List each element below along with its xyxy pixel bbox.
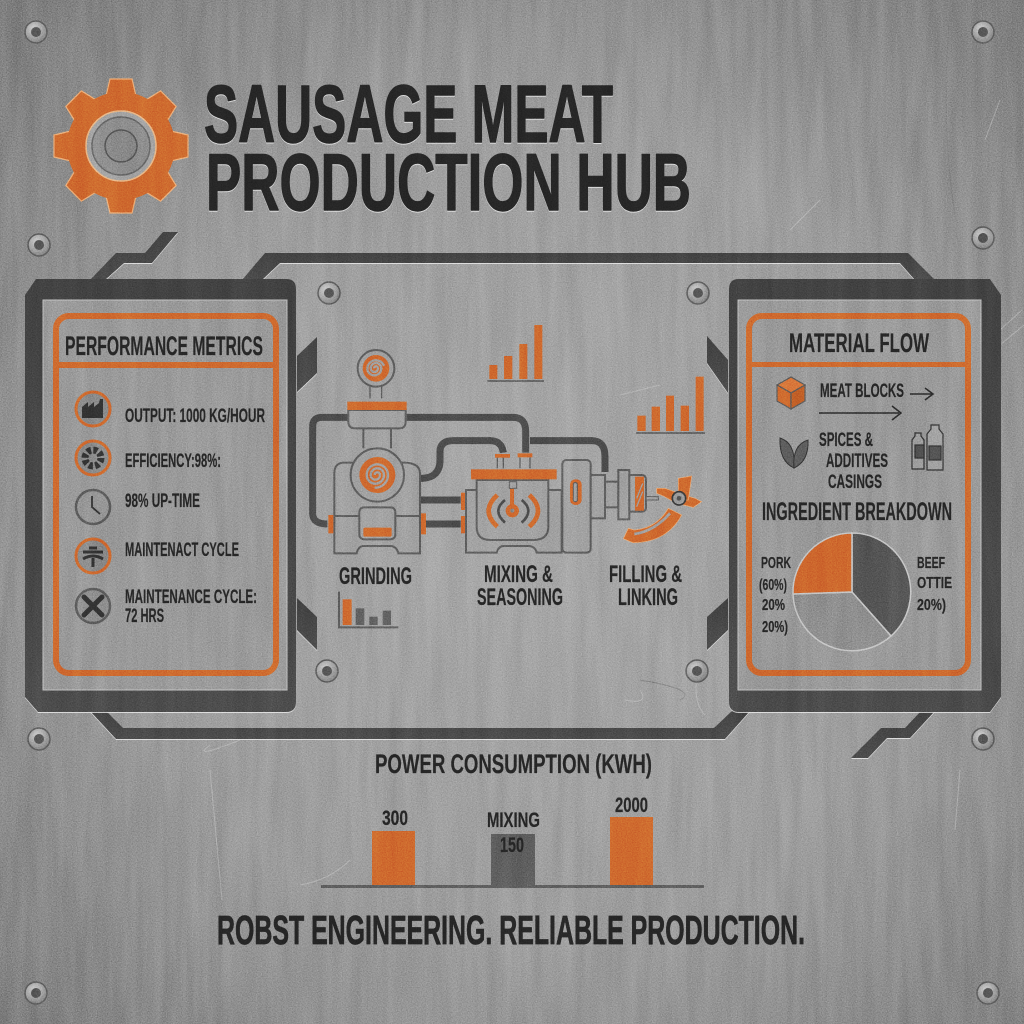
mixer agitator waves xyxy=(489,495,538,527)
label: spices: SPICES & xyxy=(819,430,873,451)
panel: production process machinery xyxy=(313,325,705,627)
arrow: meat blocks xyxy=(910,388,933,400)
metric: uptime: 98% UP-TIME xyxy=(125,491,200,512)
label: additives: ADDITIVES xyxy=(826,451,888,472)
metric: efficiency: EFFICIENCY:98%: xyxy=(125,451,221,472)
mixer machine xyxy=(466,457,646,553)
bar chart: grinding xyxy=(339,592,398,627)
label: meat blocks: MEAT BLOCKS xyxy=(820,381,904,402)
label: linking: LINKING xyxy=(618,584,678,611)
heading: PERFORMANCE METRICS xyxy=(65,331,263,361)
pie labels right xyxy=(917,555,952,614)
panel plate xyxy=(43,300,287,690)
pie labels left: PORK xyxy=(761,555,791,572)
heading: MATERIAL FLOW xyxy=(789,328,929,358)
label: mixing: MIXING & xyxy=(484,561,553,588)
pie labels right: OTTIE xyxy=(917,575,952,592)
label: seasoning: SEASONING xyxy=(477,584,563,611)
grinder machine xyxy=(334,350,420,553)
pie labels left: 20% xyxy=(762,597,785,614)
pie chart xyxy=(793,533,911,651)
arrow: flow xyxy=(819,406,901,420)
bar chart: top right xyxy=(636,377,705,434)
icon: factory xyxy=(76,392,110,426)
metric: maintenance: MAINTENACT CYCLE xyxy=(125,540,239,561)
process labels xyxy=(339,561,682,611)
pie labels left: (60%) xyxy=(759,577,787,594)
panel: material flow xyxy=(729,279,1001,712)
header divider xyxy=(59,362,273,368)
orange border xyxy=(749,316,968,673)
panel plate xyxy=(738,300,981,690)
pie labels left xyxy=(759,555,791,636)
title xyxy=(204,69,691,228)
value: 300: 300 xyxy=(382,807,408,830)
icon: meat cube xyxy=(777,377,805,409)
pipes xyxy=(313,417,605,524)
label: filling: FILLING & xyxy=(609,561,682,588)
metric: hours: 72 HRS xyxy=(125,606,164,627)
label: casings: CASINGS xyxy=(828,472,882,493)
pie labels right: BEEF xyxy=(917,555,945,572)
frame connectors xyxy=(90,232,935,758)
metric: maintenance cycle: MAINTENANCE CYCLE: xyxy=(125,587,257,608)
grinder spirals xyxy=(367,360,388,488)
bar chart: top center xyxy=(487,325,544,382)
pie labels right: 20%) xyxy=(917,597,946,614)
icon: orange gear logo xyxy=(54,79,188,213)
background scratches xyxy=(204,10,1024,900)
value: 150: 150 xyxy=(500,834,524,857)
icon: efficiency gear xyxy=(76,441,110,475)
label: grinding: GRINDING xyxy=(339,563,412,590)
mixer orange parts xyxy=(461,453,644,533)
icon: crossed tools xyxy=(76,589,110,623)
mixer details xyxy=(573,483,577,502)
title: PRODUCTION HUB xyxy=(206,138,691,228)
grinder orange parts xyxy=(328,355,426,537)
icon: maintenance valve xyxy=(76,539,110,573)
linking clamp xyxy=(623,476,702,543)
heading: power consumption: POWER CONSUMPTION (KWH) xyxy=(375,749,652,779)
panel: performance metrics xyxy=(25,279,296,712)
header divider xyxy=(752,362,966,367)
icon: clock xyxy=(76,490,110,524)
panel frame xyxy=(25,279,296,712)
orange border xyxy=(56,316,276,673)
bar chart: power consumption xyxy=(321,794,704,888)
title: SAUSAGE MEAT xyxy=(204,69,613,160)
label: mixing: MIXING xyxy=(487,809,540,832)
icon: spice leaves xyxy=(780,438,808,468)
pie labels left: 20%) xyxy=(762,619,788,636)
value: 2000: 2000 xyxy=(615,794,648,817)
metric: output: OUTPUT: 1000 KG/HOUR xyxy=(125,406,265,427)
icon: bottles xyxy=(912,425,943,470)
panel frame xyxy=(729,279,1001,712)
